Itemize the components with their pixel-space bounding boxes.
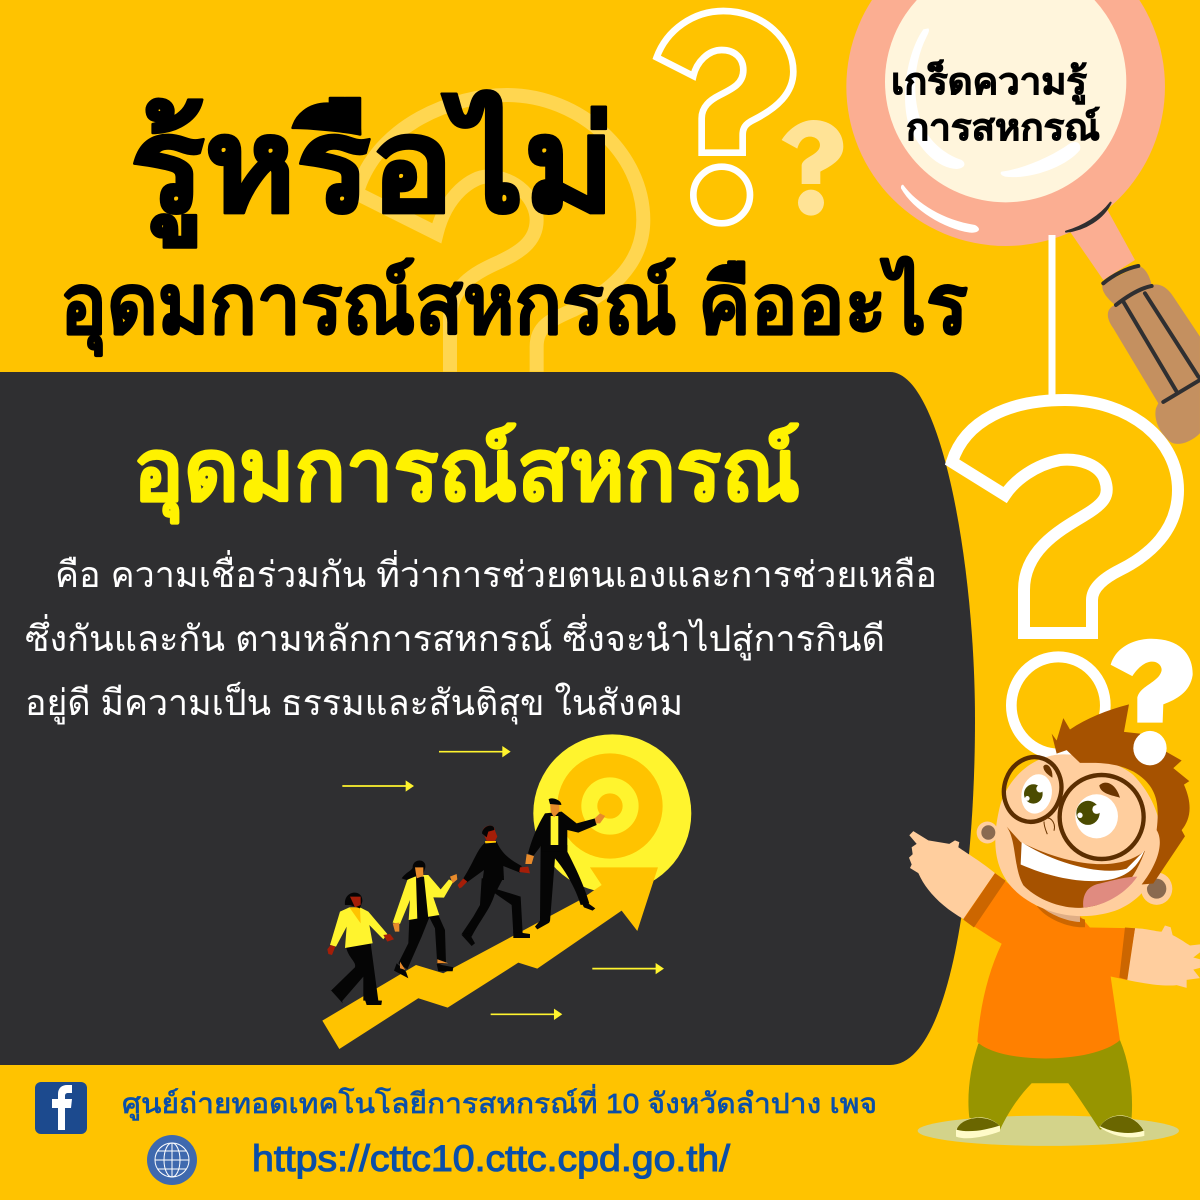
- icon: small cream question mark: [782, 120, 843, 216]
- icon: target: [533, 734, 691, 892]
- heading: panel heading: อุดมการณ์สหกรณ์: [133, 423, 800, 524]
- icon: large outlined question mark: [952, 235, 1178, 633]
- mouth: [1007, 827, 1145, 908]
- figure: man 2: [525, 798, 605, 929]
- head: [995, 754, 1162, 916]
- nose: [1044, 818, 1055, 834]
- illustration: team climbing arrow toward target: [322, 734, 691, 1049]
- lens frame: [846, 0, 1165, 246]
- shoes: [956, 1115, 1144, 1138]
- highlights: [901, 28, 1080, 233]
- website url: https://cttc10.cttc.cpd.go.th/: [252, 1138, 731, 1179]
- eyes: [1017, 771, 1118, 838]
- illustration: cartoon boy: [909, 639, 1200, 1146]
- footer: website line: [147, 1135, 731, 1185]
- text block: definition: ซึ่งกันและกัน ตามหลักการสหกรณ์ ซึ่งจะนำไปสู่การกินดี: [25, 614, 885, 661]
- ears: [977, 821, 1172, 905]
- figure: man 1: [458, 826, 530, 946]
- icon: globe: [147, 1135, 197, 1185]
- eyebrows: [1043, 765, 1120, 798]
- white question mark: [1111, 639, 1193, 765]
- magnifier label: [891, 58, 1100, 148]
- pants: [968, 1040, 1132, 1130]
- footer: organisation line: [35, 1082, 877, 1134]
- lens glass: [885, 0, 1126, 202]
- handle: [1066, 203, 1200, 444]
- dark collar line: [1066, 203, 1111, 232]
- hair: [1052, 704, 1190, 884]
- shirt: [963, 873, 1135, 1058]
- text block: definition: คือ ความเชื่อร่วมกัน ที่ว่าการช่วยตนเองและการช่วยเหลือ: [55, 550, 937, 595]
- text block: definition: [25, 550, 937, 725]
- figure: woman 2: [393, 860, 457, 978]
- ring of question mark: [1011, 657, 1105, 754]
- tongue: [1083, 877, 1137, 908]
- text block: definition: อยู่ดี มีความเป็น ธรรมและสันติสุข ในสังคม: [25, 680, 683, 725]
- teeth: [1021, 842, 1144, 881]
- icon: outlined question mark top: [657, 11, 793, 223]
- organisation name: ศูนย์ถ่ายทอดเทคโนโลยีการสหกรณ์ที่ 10 จังหวัดลำปาง เพจ: [122, 1084, 877, 1121]
- title: รู้หรือไม่: [130, 90, 615, 248]
- neck: [1040, 906, 1080, 922]
- magnifier label: การสหกรณ์: [906, 107, 1100, 148]
- glasses: [995, 749, 1144, 859]
- icon: faint background question mark: [357, 95, 643, 372]
- icon: facebook: [35, 1082, 87, 1134]
- magnifier label: เกร็ดความรู้: [891, 58, 1087, 105]
- icon: magnifying glass: [846, 0, 1200, 444]
- panel: dark definition panel: [0, 372, 975, 1065]
- arrows: motion lines: [342, 746, 664, 1020]
- ground shadow: [918, 1116, 1179, 1146]
- right arm: [1127, 925, 1200, 988]
- sleeve trims: [963, 873, 1135, 980]
- arrow: growth arrow: [322, 867, 658, 1049]
- subtitle: อุดมการณ์สหกรณ์ คืออะไร: [60, 256, 968, 357]
- figure: woman 1: [327, 893, 394, 1005]
- left arm: [909, 831, 995, 919]
